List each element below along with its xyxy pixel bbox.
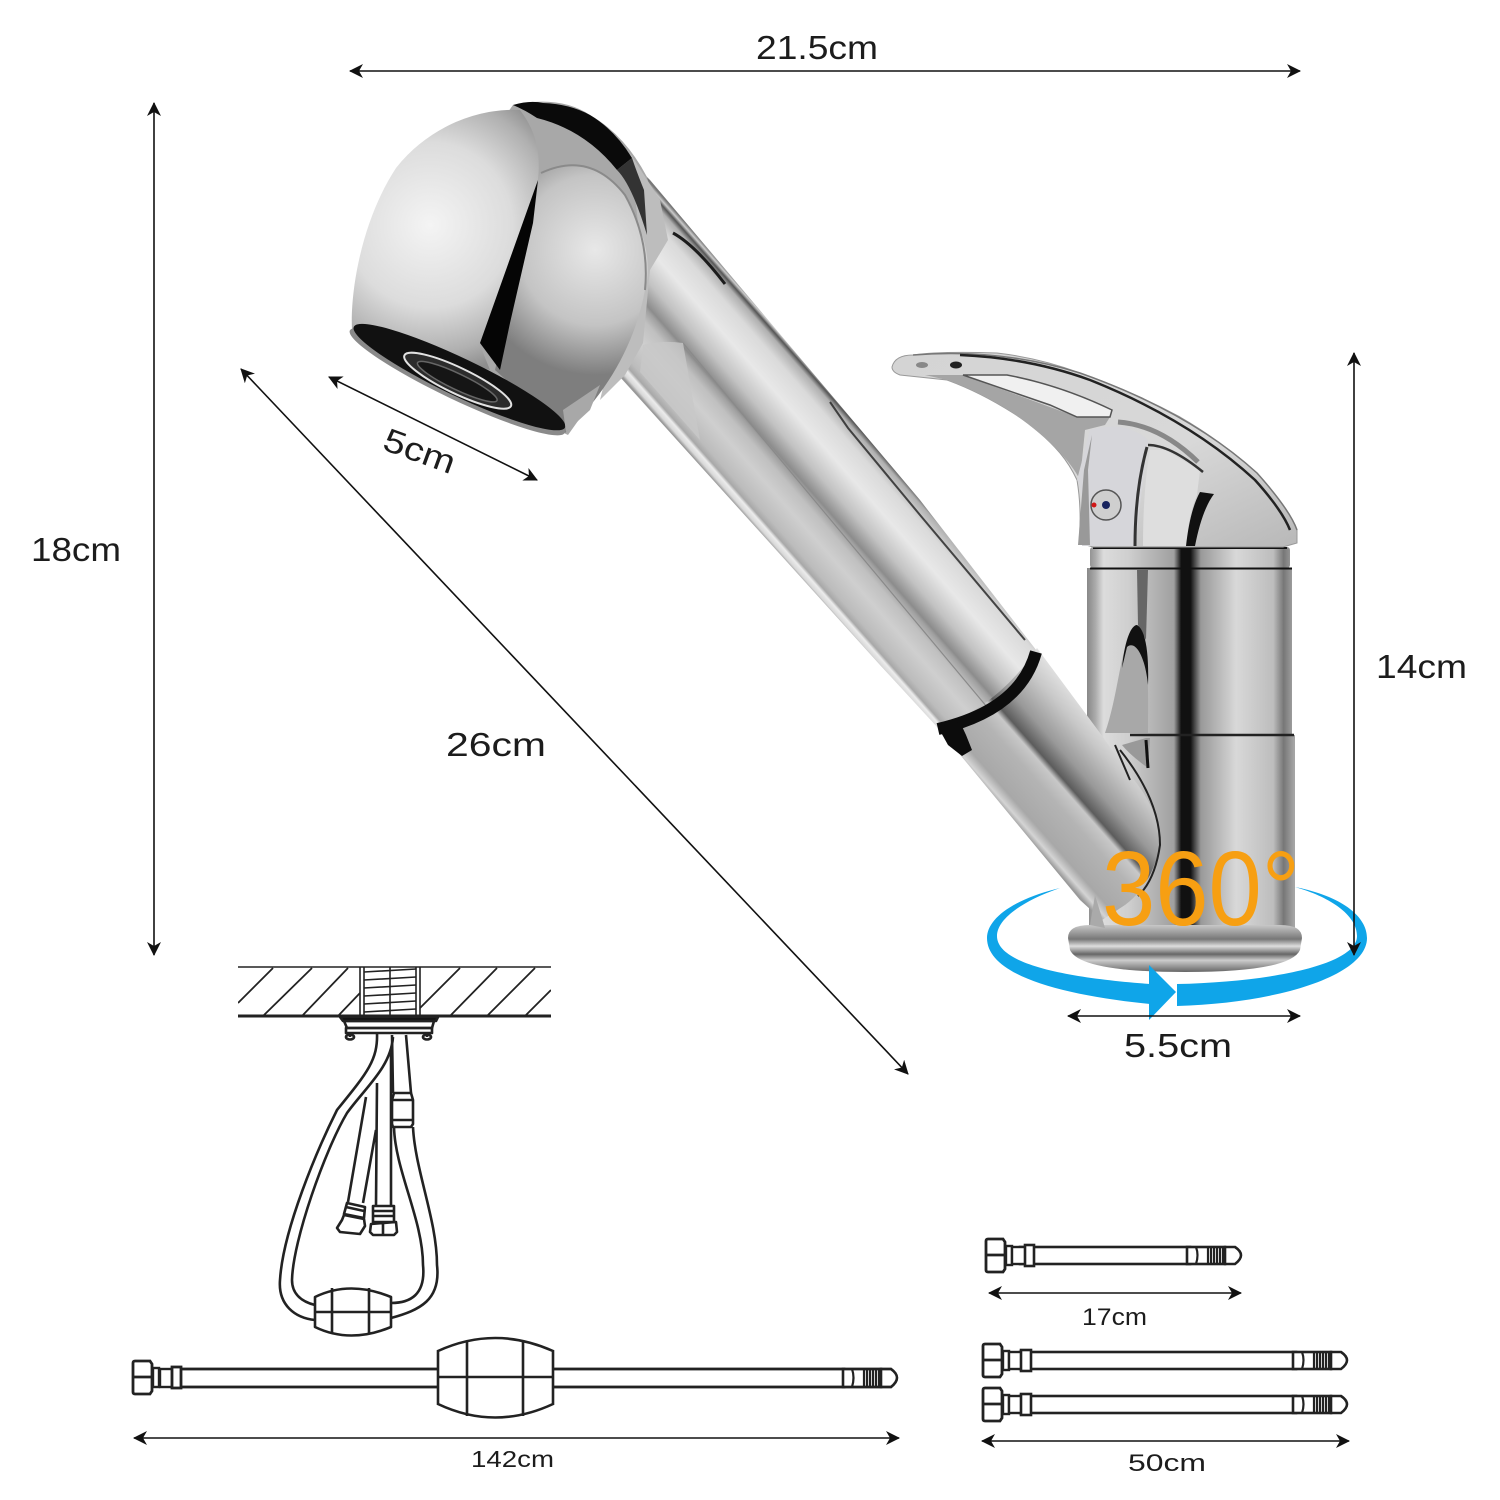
spray face (342, 309, 575, 449)
dimension: base diameter 5.5cm: 5.5cm (1124, 1027, 1232, 1064)
handle collar (1090, 547, 1292, 568)
360 degree label: 360° (1102, 830, 1300, 948)
front panel (1143, 450, 1200, 546)
temperature knob (1091, 490, 1121, 520)
hose coupling (392, 1093, 413, 1127)
lower long supply hose (983, 1388, 1347, 1421)
upper long supply hose (983, 1344, 1347, 1377)
dimension: spout length 26cm (241, 369, 908, 1074)
supply tubes (337, 1053, 397, 1235)
pull-out spout tube (620, 170, 1160, 928)
dimension: long hose 50cm: 50cm (1128, 1450, 1206, 1477)
weight bulb (438, 1338, 553, 1418)
mixer lever handle (892, 352, 1297, 547)
hose loop (280, 1033, 437, 1320)
faucet body column (1087, 568, 1295, 935)
dimension: spout length 26cm: 26cm (446, 726, 546, 763)
360 degree rotation arrow (987, 887, 1367, 1020)
faucet illustration (342, 102, 1302, 972)
black band on spout (938, 652, 1036, 729)
installation diagram under the counter (238, 967, 551, 1336)
dimension: overall width 21.5cm: 21.5cm (756, 29, 878, 66)
dimension: overall height 18cm: 18cm (31, 531, 121, 568)
spray head (342, 102, 668, 449)
lower spout section (938, 648, 1160, 920)
dimension: body height 14cm: 14cm (1376, 648, 1467, 685)
mounting flange (340, 1017, 438, 1040)
neck around knob (1077, 427, 1148, 546)
dimension: short hose 17cm: 17cm (1082, 1304, 1147, 1331)
short supply hose (986, 1239, 1241, 1272)
dimension: head diameter 5cm (329, 377, 537, 481)
faucet base ring (1068, 925, 1302, 972)
long pull-out hose with weight (133, 1338, 897, 1418)
weight bulb on hose (315, 1288, 391, 1336)
lever underside (925, 375, 1110, 480)
dimension: head diameter 5cm: 5cm (379, 421, 461, 481)
dimension: hose length 142cm: 142cm (471, 1446, 554, 1472)
counter section (238, 967, 551, 1016)
